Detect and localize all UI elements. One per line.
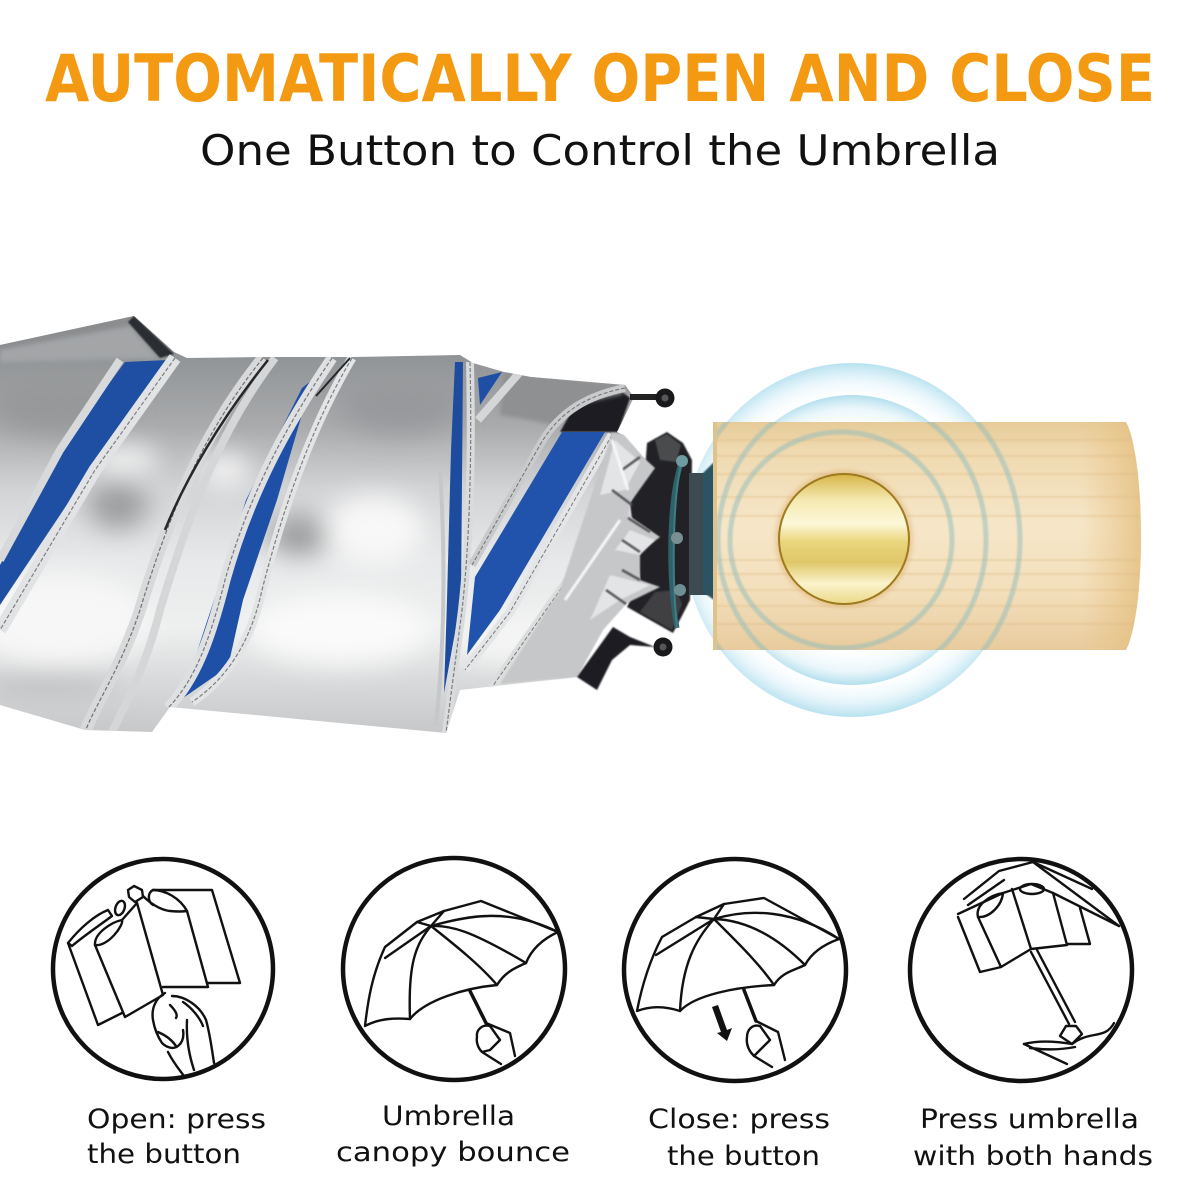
caption: close: Close: press: [648, 1104, 830, 1135]
step 3: close icon: [624, 859, 846, 1081]
right fold dark interior: [560, 392, 630, 432]
ripple rings: [684, 363, 1020, 717]
step 4: press with both hands icon: [910, 859, 1132, 1081]
handle collar: [689, 473, 714, 595]
caption: close: the button: [667, 1141, 820, 1172]
wooden handle: [713, 422, 1141, 650]
caption: press with both hands: [913, 1104, 1153, 1172]
lower rib tip: [577, 627, 655, 690]
upper rib tip: [630, 394, 660, 400]
subtitle: One Button to Control the Umbrella: [200, 126, 1000, 175]
caption: press with both hands: Press umbrella: [920, 1104, 1139, 1135]
caption: open: Open: press: [87, 1104, 266, 1135]
stitched edge bands: [0, 358, 625, 733]
caption: canopy bounce: [336, 1101, 570, 1168]
caption: press with both hands: with both hands: [913, 1141, 1153, 1172]
caption: canopy bounce: Umbrella: [382, 1101, 515, 1132]
arrow: press downward: [712, 1005, 732, 1041]
step 2: canopy bounce icon: [343, 858, 565, 1080]
caption: open: the button: [87, 1139, 241, 1170]
ripple rings over handle: [717, 422, 1023, 650]
fabric shading: [0, 393, 524, 700]
dark hub interior: [627, 432, 692, 633]
umbrella hub and rib tips: [500, 388, 714, 690]
caption: open: [87, 1104, 266, 1170]
golden push button: [775, 470, 913, 608]
caption: canopy bounce: canopy bounce: [336, 1137, 570, 1168]
folded umbrella canopy: [0, 316, 660, 733]
blue strips: [0, 360, 168, 605]
hub ring: [671, 460, 682, 628]
step 1: open icon: [53, 859, 273, 1079]
caption: close: [648, 1104, 830, 1172]
crumpled fabric end: [500, 433, 660, 684]
